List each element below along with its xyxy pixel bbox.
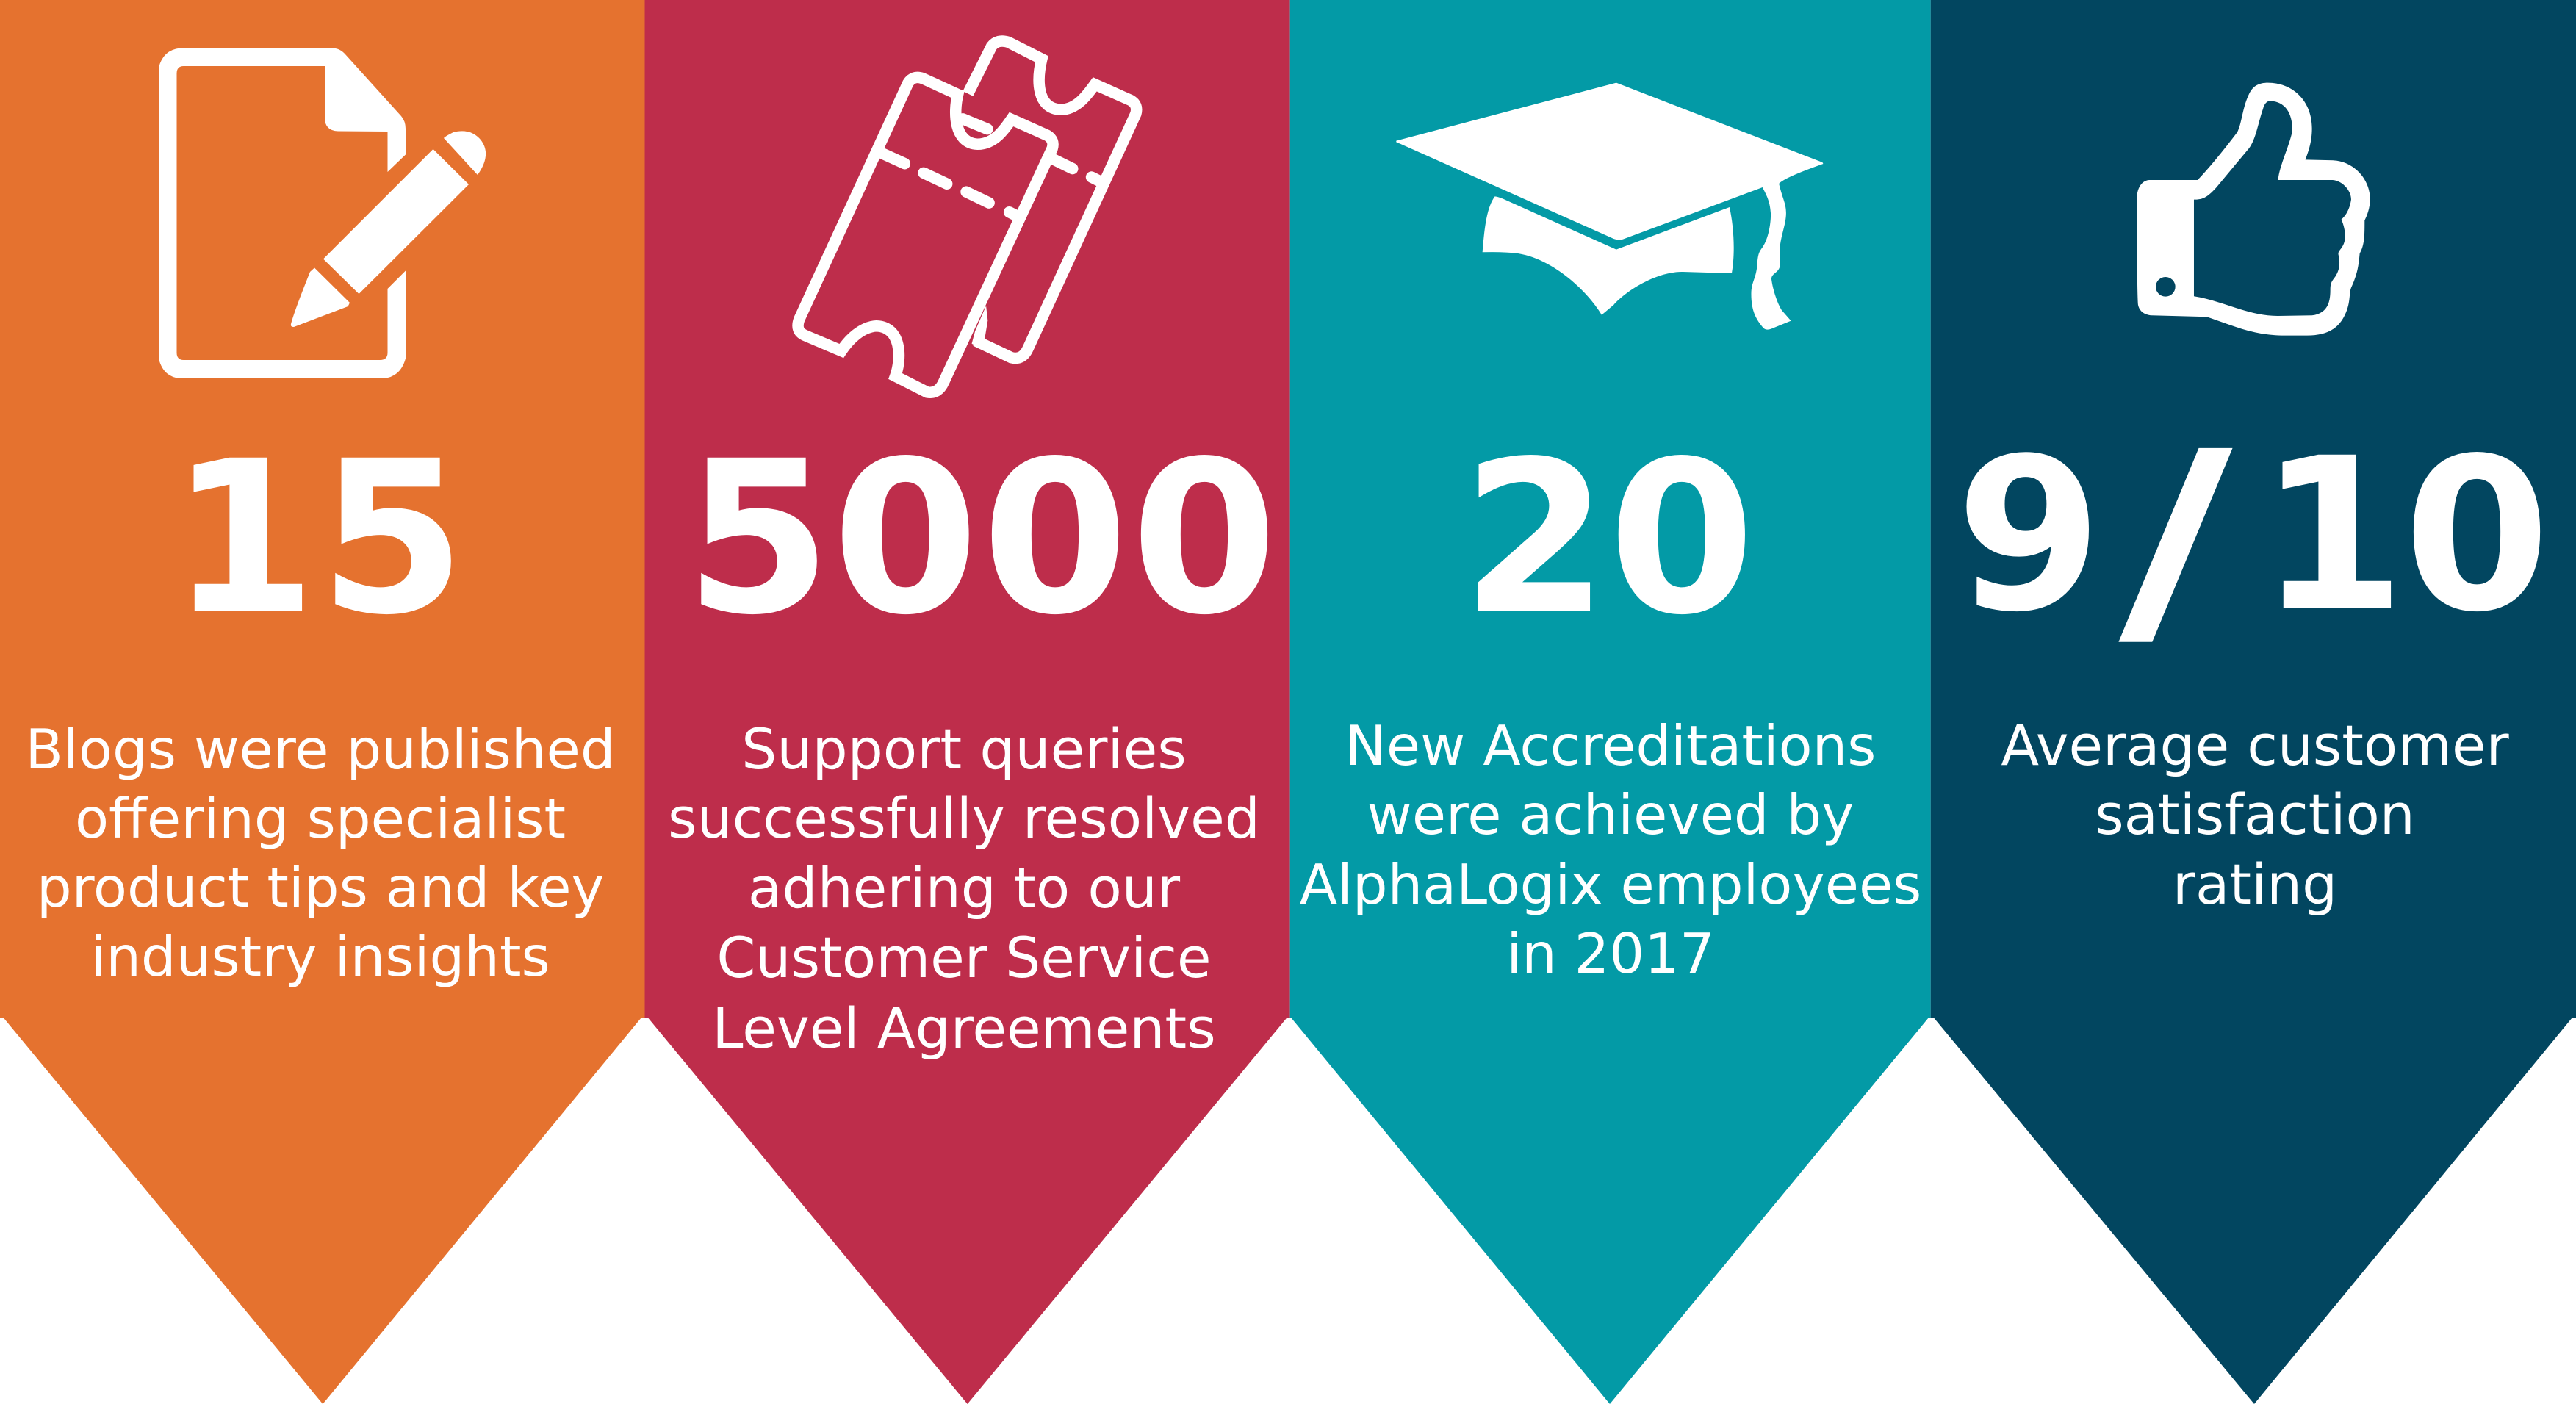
number: 5000: 0 [1131,416,1278,661]
icon: graduation cap [1396,83,1823,330]
panel: customer satisfaction [1931,0,2576,1404]
text: support description: successfully resolved [668,786,1260,851]
text: accreditations description: AlphaLogix employees [1300,852,1921,917]
text: blogs description: industry insights [90,924,550,989]
text: blogs description: Blogs were published [25,717,616,782]
number: 15: 5 [319,416,466,661]
number: 9/10: / [2118,400,2236,676]
crimson chevron banner [645,0,1290,1404]
number: 9/10: 1 [2259,413,2406,658]
number: 9/10: 9 [1956,413,2102,658]
text: satisfaction description: Average customer [2001,713,2510,778]
number: 9/10 [1956,400,2550,676]
text: accreditations description: in 2017 [1506,921,1715,986]
text: satisfaction description [2001,713,2510,917]
text: satisfaction description: rating [2173,852,2337,917]
number: 5000: 0 [832,416,979,661]
number: 5000: 0 [982,416,1129,661]
number: 20: 20 [1461,416,1755,661]
text: accreditations description: New Accreditations [1345,713,1876,778]
text: accreditations description: were achieved by [1367,782,1854,847]
orange chevron banner [0,0,645,1404]
text: blogs description: product tips and key [37,855,604,920]
text: support description: Customer Service [716,926,1212,990]
panel: support queries [645,0,1290,1404]
icon: document with pencil [159,48,486,378]
number: 5000 [685,416,1278,661]
teal chevron banner [1290,0,1931,1404]
navy chevron banner [1931,0,2576,1404]
number: 5000: 5 [685,416,832,661]
number: 9/10: 0 [2403,413,2550,658]
number: 15 [170,416,466,661]
icon: thumbs up [2137,83,2370,336]
text: support description [668,717,1260,1061]
text: support description: Level Agreements [712,996,1216,1061]
text: accreditations description [1300,713,1921,986]
text: blogs description: offering specialist [75,786,566,851]
text: support description: Support queries [741,717,1187,782]
panel: blogs [0,0,645,1404]
number: 15: 1 [170,416,317,661]
panel: accreditations [1290,0,1931,1404]
text: blogs description [25,717,616,989]
text: support description: adhering to our [748,856,1181,921]
icon: tickets [798,41,1137,392]
text: satisfaction description: satisfaction [2095,782,2415,847]
